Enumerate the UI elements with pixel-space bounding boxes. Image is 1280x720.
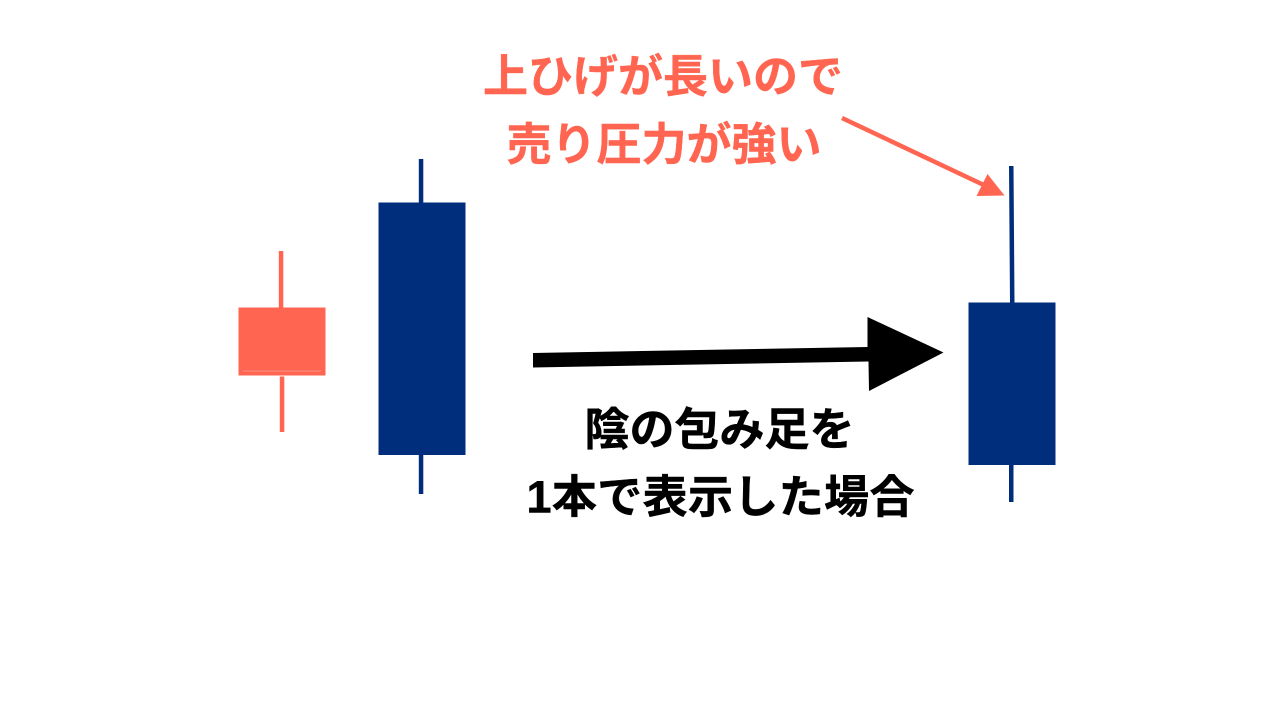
callout text: 上ひげが長いので: [483, 51, 843, 102]
caption text: 1本で表示した場合: [526, 472, 914, 522]
combined navy candlestick with long upper wick: [968, 166, 1056, 502]
bullish red candlestick: [238, 251, 326, 432]
callout text: 売り圧力が強い: [506, 119, 822, 170]
caption text: 陰の包み足を: [584, 404, 855, 455]
callout text: [483, 51, 843, 170]
large black arrow: [533, 317, 944, 391]
red callout arrow: [842, 118, 1004, 196]
bearish navy candlestick: [378, 159, 466, 494]
caption text: [526, 404, 914, 522]
